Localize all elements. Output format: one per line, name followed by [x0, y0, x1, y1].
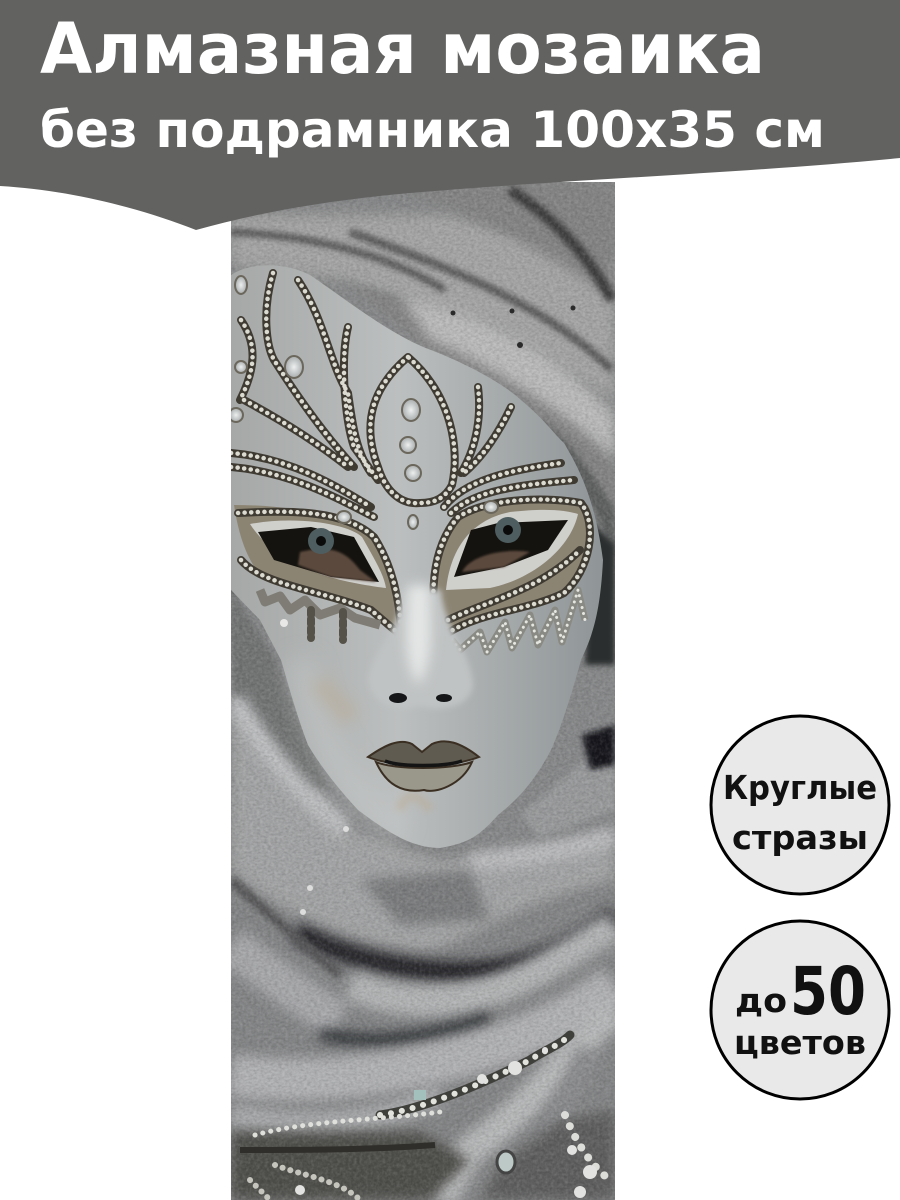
- pearls: [229, 276, 498, 529]
- badge: up to 50 colours: 50: [790, 953, 866, 1030]
- subtitle: без подрамника 100х35 см: [40, 101, 825, 159]
- mask face: [231, 265, 603, 848]
- header banner: [0, 0, 900, 230]
- artwork: venetian mask portrait: [229, 182, 615, 1200]
- eye mask left: [234, 505, 402, 635]
- jewelled embroidery at bottom: [240, 1035, 610, 1200]
- bead fringe: [260, 590, 585, 652]
- headscarf folds: [231, 182, 615, 560]
- dark gap behind mask: [231, 500, 615, 665]
- nose: [387, 578, 474, 708]
- eye mask right: [438, 504, 592, 628]
- ornament: beaded forehead and rims: [229, 273, 590, 652]
- badge: up to 50 colours: [711, 921, 889, 1099]
- lower drapery folds: [231, 590, 615, 1200]
- badge: round rhinestones: стразы: [732, 818, 868, 857]
- badge: up to 50 colours: цветов: [734, 1023, 866, 1062]
- badge: up to 50 colours: до: [735, 981, 787, 1020]
- fabric texture: [231, 182, 615, 1200]
- badge: round rhinestones: [711, 716, 889, 894]
- lips: [368, 741, 479, 791]
- scattered studs: [300, 306, 576, 915]
- title: Алмазная мозаика: [40, 8, 765, 90]
- badge: round rhinestones: Круглые: [723, 768, 877, 807]
